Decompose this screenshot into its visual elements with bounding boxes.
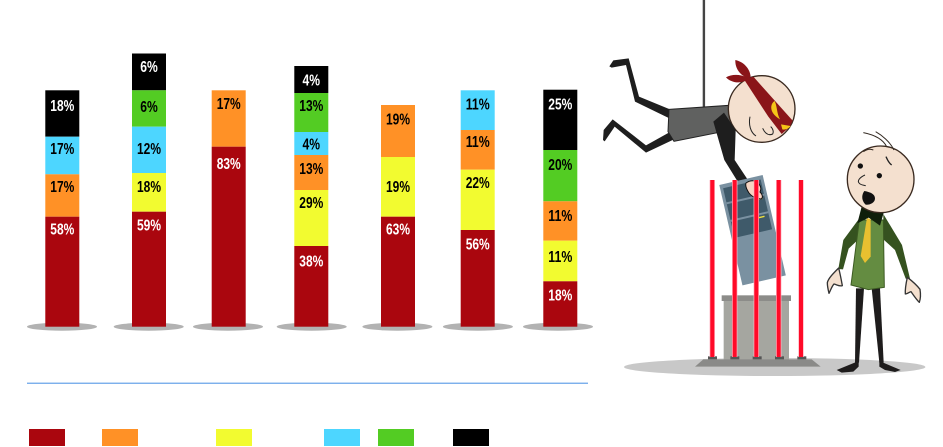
man eyebrow (886, 157, 892, 165)
bar 2: 6% (140, 99, 158, 116)
bar 1: 17% (50, 179, 74, 196)
bar 2: 18% (137, 179, 161, 196)
bar 6: 11% (466, 134, 490, 151)
legend swatches (29, 429, 489, 446)
bar 5: 63% (386, 222, 410, 238)
illustration: laser beams (710, 180, 804, 357)
ninja smile and nose (749, 117, 773, 136)
man arms (838, 218, 861, 269)
bar 2: 59% (137, 218, 161, 234)
ninja head (728, 76, 795, 142)
man shirt (851, 220, 884, 290)
bar 3: 17% (217, 96, 241, 113)
bandana knot (726, 60, 751, 82)
ninja bandana (744, 77, 793, 134)
bar 4: 13% (299, 98, 323, 115)
illustration: ninja thief (603, 58, 795, 183)
bar 2: 12% (137, 141, 161, 158)
illustration: server cabinet (719, 175, 786, 285)
ninja body (668, 105, 734, 141)
man feet (837, 361, 859, 373)
ninja lower leg (603, 119, 673, 153)
bar 4: 4% (303, 72, 320, 90)
ninja upper leg (609, 58, 670, 119)
illustration: pedestal (695, 295, 821, 367)
man tie (861, 218, 871, 263)
man head (847, 146, 914, 213)
bar 6: 56% (466, 236, 490, 254)
bar 6: 22% (466, 175, 490, 192)
bar 4: 13% (299, 161, 323, 178)
illustration: rope (703, 0, 705, 107)
bar 1: 17% (50, 141, 74, 158)
bar 3 (193, 90, 263, 331)
man hands (827, 268, 842, 293)
bar 7 (523, 90, 593, 331)
bar 7: 11% (548, 208, 572, 225)
bar 1 (27, 90, 97, 331)
bar 2: 6% (140, 59, 158, 76)
bar 7: 20% (548, 157, 572, 174)
bar 5: 19% (386, 179, 410, 196)
man legs (855, 288, 864, 363)
bar 5: 19% (386, 112, 410, 128)
ninja eyes (771, 101, 791, 130)
bar 6 (443, 90, 513, 331)
bar 1: 58% (50, 222, 74, 238)
bar 4: 29% (299, 195, 323, 212)
bar 2 (114, 54, 184, 331)
man nose (858, 175, 866, 186)
bar 4 (277, 66, 347, 331)
illustration: ninja hand (746, 181, 762, 199)
bar 4: 38% (299, 254, 323, 270)
man hair (863, 132, 894, 152)
bar 5 (362, 105, 432, 331)
bar 7: 25% (548, 96, 572, 114)
bar 3: 83% (217, 156, 241, 173)
man collar (857, 207, 884, 226)
bar 4: 4% (303, 136, 320, 154)
bar 7: 11% (548, 249, 572, 266)
man eyes (858, 163, 863, 169)
bar 7: 18% (548, 288, 572, 304)
illustration: ground shadow (624, 358, 925, 376)
man mouth (862, 191, 875, 205)
stacked bar chart (27, 54, 593, 331)
bar 1: 18% (50, 98, 74, 115)
illustration: bystander man (827, 132, 920, 373)
ninja arm (713, 113, 750, 183)
bar 6: 11% (466, 96, 490, 114)
